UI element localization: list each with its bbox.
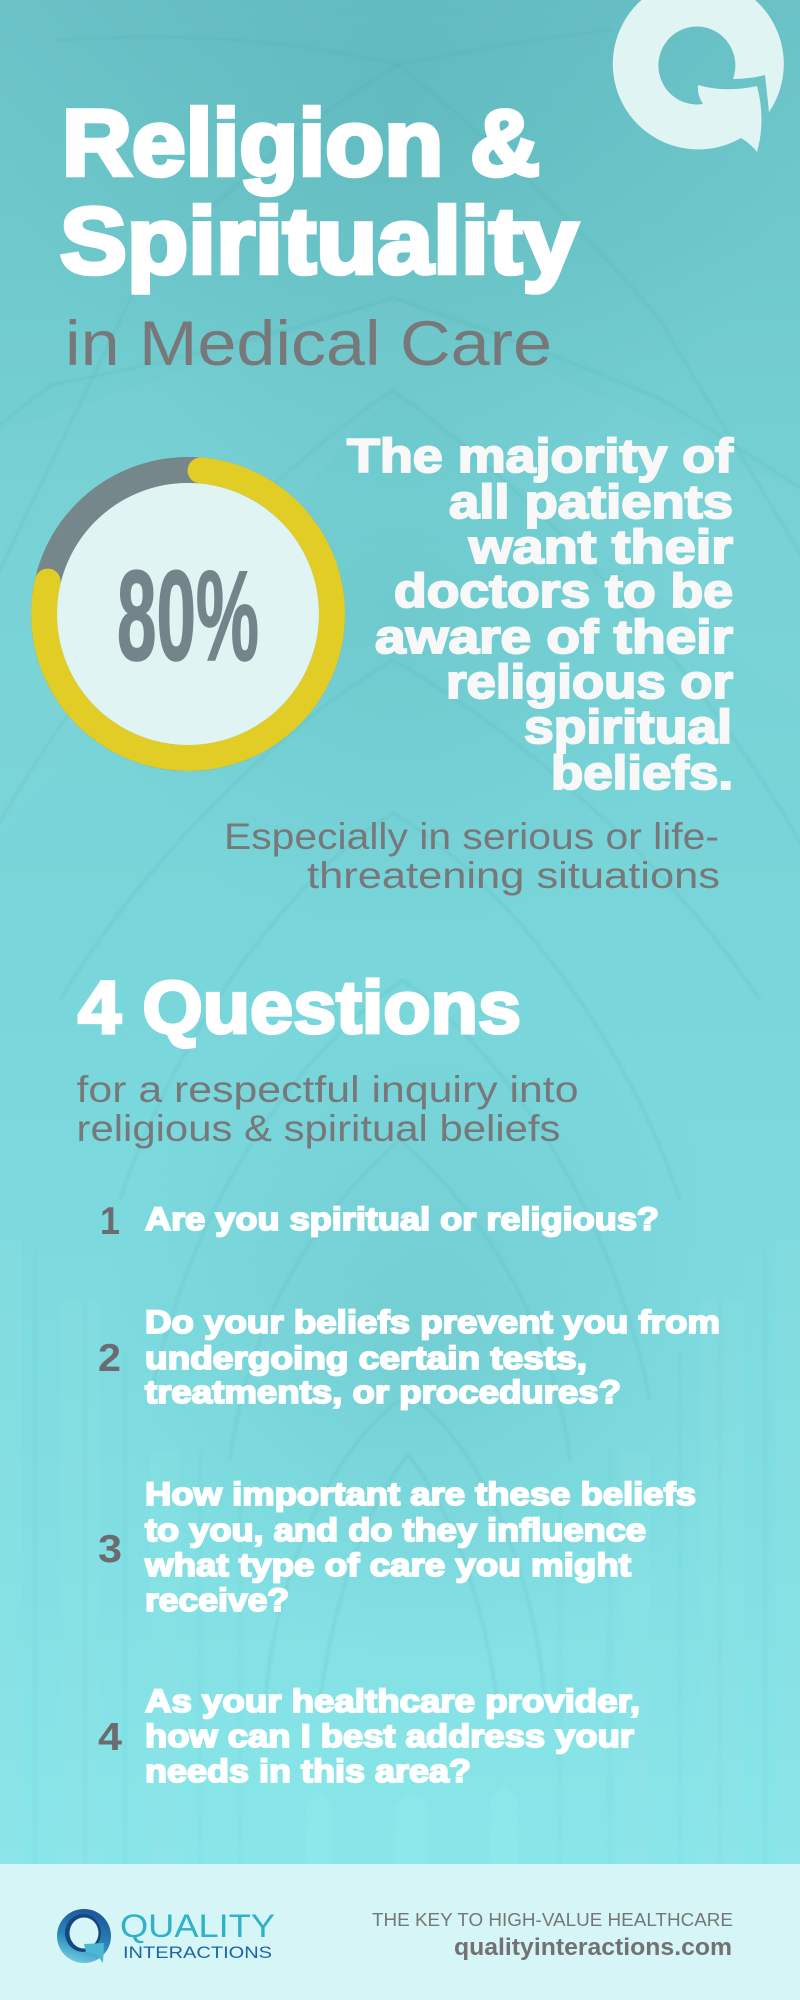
title (60, 90, 578, 293)
question 4: As your healthcare provider, (145, 1683, 640, 1719)
question 2: treatments, or procedures? (145, 1374, 621, 1410)
question 3: what type of care you might (144, 1547, 631, 1583)
logo mark: large speech-bubble Q (613, 0, 784, 152)
question 1: Are you spiritual or religious? (145, 1201, 659, 1237)
statement text: beliefs. (551, 746, 733, 799)
statement text: The majority of (347, 429, 733, 482)
donut chart: 80%: 80% (117, 545, 259, 688)
question 4: needs in this area? (145, 1753, 471, 1789)
question 3: to you, and do they influence (145, 1512, 646, 1548)
footer logo icon (57, 1909, 111, 1963)
statement text: want their (468, 520, 733, 573)
footer url: qualityinteractions.com (454, 1934, 732, 1961)
title: Religion & (62, 90, 540, 195)
question 2: Do your beliefs prevent you from (145, 1304, 720, 1340)
footer logo wordmark: INTERACTIONS (123, 1943, 272, 1962)
question 1: 1 (100, 1200, 120, 1243)
section subheading: religious & spiritual beliefs (76, 1108, 560, 1149)
footer logo wordmark (120, 1908, 275, 1962)
section heading: 4 Questions (78, 966, 521, 1049)
statement text: doctors to be (394, 564, 733, 617)
title: Spirituality (60, 188, 578, 293)
statement text: spiritual (524, 700, 732, 753)
question 3 (98, 1476, 696, 1618)
question 3: 3 (98, 1528, 122, 1571)
section subheading: for a respectful inquiry into (76, 1069, 578, 1110)
section subheading (76, 1069, 578, 1149)
statement text: all patients (449, 475, 733, 528)
statement text (347, 429, 733, 799)
question 4 (98, 1683, 640, 1789)
footer logo wordmark: QUALITY (120, 1908, 275, 1944)
question 1 (100, 1200, 659, 1243)
question 2: undergoing certain tests, (145, 1340, 587, 1376)
question 3: How important are these beliefs (145, 1476, 696, 1512)
question 4: how can I best address your (145, 1718, 634, 1754)
statement text: religious or (446, 655, 733, 708)
subtitle: in Medical Care (65, 309, 552, 379)
question 3: receive? (145, 1582, 289, 1618)
lower columns (0, 1240, 800, 1864)
footer band (0, 1864, 800, 2000)
statement note: threatening situations (307, 855, 720, 896)
statement text: aware of their (375, 610, 733, 663)
footer tagline: THE KEY TO HIGH-VALUE HEALTHCARE (372, 1910, 733, 1930)
statement note: Especially in serious or life- (224, 816, 719, 857)
question 2: 2 (98, 1337, 121, 1380)
donut chart: 80% (44, 470, 332, 758)
statement note (224, 816, 720, 896)
question 4: 4 (98, 1716, 122, 1759)
question 2 (98, 1304, 720, 1410)
